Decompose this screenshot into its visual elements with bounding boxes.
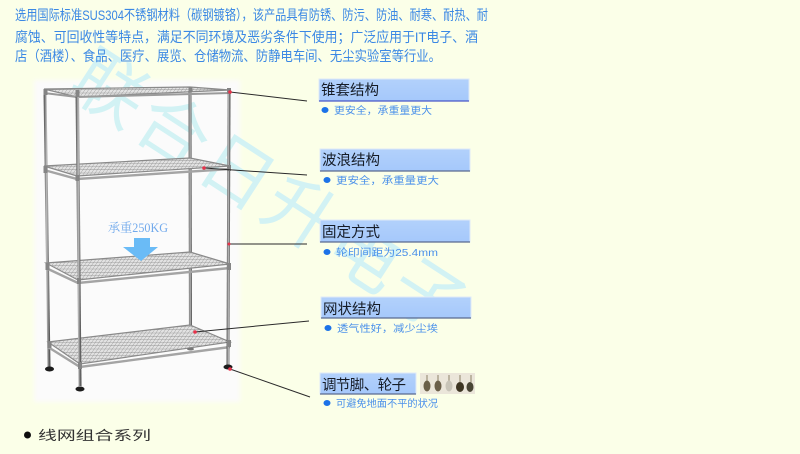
intro text block [15, 7, 488, 64]
callout: wave structure: 波浪结构 [322, 152, 380, 169]
photo backdrop [34, 80, 240, 402]
leader markers [193, 90, 232, 371]
callout: fixing method: 轮印间距为25.4mm [336, 246, 438, 259]
intro text block: 选用国际标准SUS304不锈钢材料（碳钢镀铬），该产品具有防锈、防污、防油、耐寒、耐热、耐 [15, 7, 488, 23]
callout: mesh structure: 网状结构 [323, 301, 381, 318]
leader lines [195, 92, 310, 397]
shelf 1 [44, 87, 230, 97]
wire shelf rack [44, 87, 232, 392]
front posts [76, 88, 230, 386]
footer caption [24, 428, 151, 443]
callout: cone sleeve structure: 更安全，承重量更大 [334, 104, 432, 117]
callout: adjustable feet and casters: 调节脚、轮子 [322, 377, 406, 394]
load label: 承重250KG [108, 220, 168, 235]
feet [45, 348, 232, 392]
callout: cone sleeve structure [319, 79, 469, 117]
icon: caster photos [420, 373, 475, 394]
intro text block: 店（酒楼）、食品、医疗、展览、仓储物流、防静电车间、无尘实验室等行业。 [15, 48, 441, 64]
back posts [44, 88, 192, 368]
callout: fixing method [320, 220, 470, 259]
callout: wave structure [320, 149, 470, 187]
shelf 3 [46, 252, 230, 283]
watermark: 联合日升电子 [57, 37, 480, 351]
icon: down arrow [123, 238, 158, 261]
callout: adjustable feet and casters [320, 373, 438, 410]
load label [108, 220, 168, 261]
post collars [44, 87, 231, 369]
shelf 2 [44, 158, 230, 179]
footer caption: 线网组合系列 [38, 428, 151, 443]
intro text block: 腐蚀、可回收性等特点，满足不同环境及恶劣条件下使用；广泛应用于IT电子、酒 [15, 29, 478, 46]
callout: adjustable feet and casters: 可避免地面不平的状况 [336, 397, 438, 410]
callout: mesh structure: 透气性好，减少尘埃 [337, 322, 438, 335]
callout: fixing method: 固定方式 [322, 224, 380, 241]
shelf 4 [48, 325, 230, 367]
callout: wave structure: 更安全，承重量更大 [336, 174, 439, 187]
callout: mesh structure [321, 297, 471, 335]
callout: cone sleeve structure: 锥套结构 [321, 82, 379, 99]
